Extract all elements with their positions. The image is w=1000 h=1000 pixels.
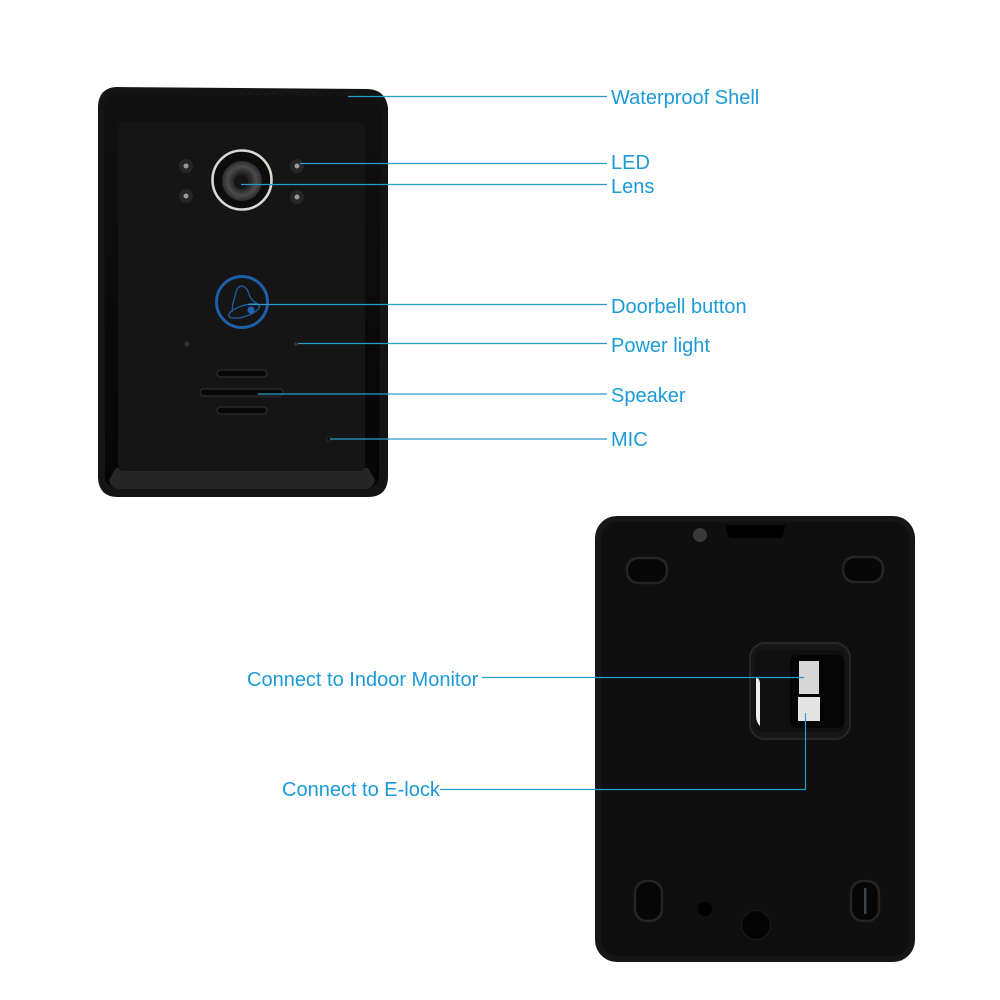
MIC hole (327, 437, 331, 441)
LED top left (179, 159, 193, 173)
top right mounting slot (843, 557, 883, 582)
label: Connect to E-lock: Connect to E-lock (282, 779, 441, 801)
label: Speaker: Speaker (611, 385, 686, 407)
screw hole (742, 910, 770, 940)
connector recess (750, 643, 850, 739)
doorbell back unit (595, 516, 915, 962)
front panel (118, 122, 365, 471)
white connector top (799, 661, 819, 694)
label: Connect to Indoor Monitor: Connect to Indoor Monitor (247, 669, 479, 691)
label: LED: LED (611, 152, 650, 174)
moulding mark (693, 528, 707, 542)
top notch (726, 525, 785, 538)
bottom right mounting slot (851, 881, 879, 921)
doorbell button icon (216, 276, 268, 328)
LED top right (290, 159, 304, 173)
label: Waterproof Shell: Waterproof Shell (611, 87, 759, 109)
white connector bottom (798, 697, 820, 721)
power light dots (184, 342, 298, 346)
callout lines (241, 96, 806, 790)
shell inner shading (104, 94, 381, 488)
top left mounting slot (627, 558, 667, 583)
camera lens (212, 150, 272, 210)
small hole (698, 902, 712, 916)
label: Lens: Lens (611, 176, 654, 198)
label: Doorbell button: Doorbell button (611, 296, 747, 318)
label: Power light: Power light (611, 335, 710, 357)
LED bottom right (290, 190, 304, 204)
bottom bevel (109, 468, 375, 489)
label: MIC: MIC (611, 429, 648, 451)
LED bottom left (179, 189, 193, 203)
bottom left mounting slot (635, 881, 662, 921)
doorbell front unit (98, 87, 388, 497)
waterproof shell (98, 87, 388, 497)
back plate (595, 516, 915, 962)
speaker slots (200, 370, 283, 414)
